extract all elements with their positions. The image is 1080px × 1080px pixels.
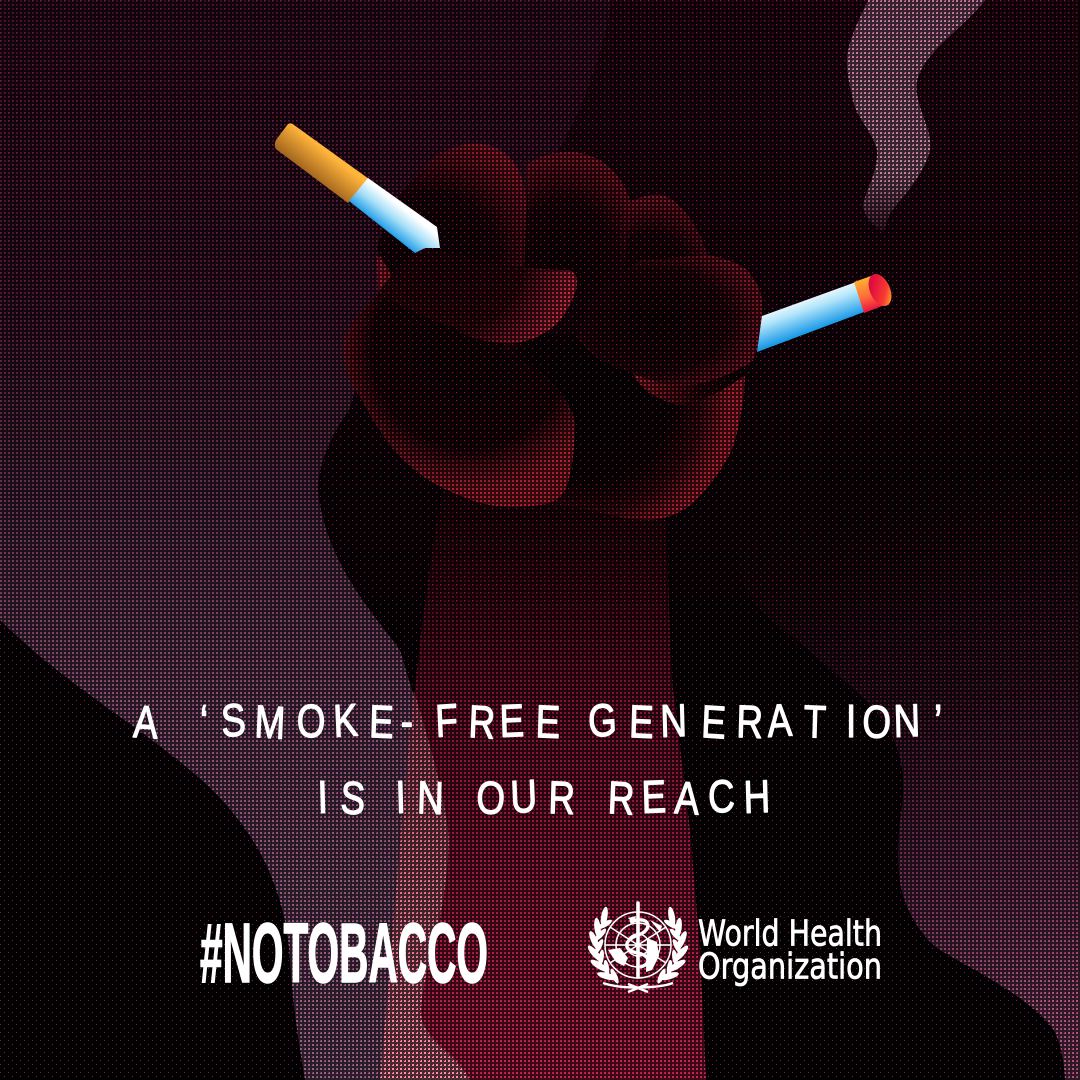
organization name second line: Organization [698, 946, 882, 988]
smoke: cigarette wisp [847, 0, 985, 232]
cigarette paper [349, 178, 440, 253]
arm [380, 488, 706, 1080]
text: #NOTOBACCO [200, 906, 488, 1000]
cigarette paper [757, 282, 864, 352]
emblem globe [605, 912, 671, 978]
headline: A ‘SMOKE-FREE GENERATION’ [132, 693, 942, 749]
fist: back left bump [377, 252, 430, 292]
emblem wreath left [586, 906, 620, 984]
WHO emblem [586, 903, 690, 992]
emblem serpent [627, 920, 648, 967]
fist: back knuckle one [377, 144, 526, 290]
emblem continents [608, 916, 662, 972]
cigarette: left, unlit end [275, 123, 440, 253]
headline [132, 693, 942, 825]
arm and smoke overlap [380, 690, 470, 1080]
organization name [698, 914, 882, 988]
emblem staff [636, 903, 640, 977]
cigarette ember [864, 270, 896, 310]
emblem wreath right [656, 906, 690, 984]
fist: thumb [378, 247, 577, 343]
emblem wreath stems [603, 983, 673, 992]
fist: front knuckle four [577, 255, 762, 385]
fist: back knuckle two [524, 152, 640, 300]
fist [343, 144, 762, 520]
fist: back knuckle three [620, 195, 712, 310]
smoke: left wave [0, 0, 612, 1080]
fist: outer lower hand [443, 330, 745, 520]
cigarette: right, lit end [757, 270, 896, 352]
cigarette burning band [854, 274, 890, 313]
headline second line: IS IN OUR REACH [317, 769, 771, 825]
fist: palm finger [343, 280, 575, 507]
organization name: World Health [698, 914, 882, 954]
smoke: right wave [720, 480, 1080, 1080]
cigarette filter [275, 123, 369, 203]
fist: little finger crescent [632, 360, 745, 405]
